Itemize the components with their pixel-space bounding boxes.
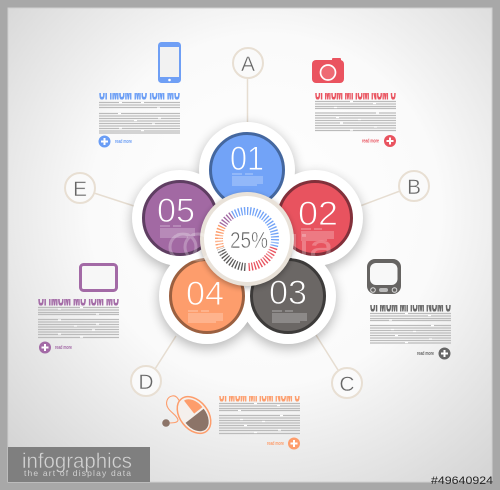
flower white petals bbox=[132, 122, 363, 344]
petal 04 orange: 04 bbox=[186, 275, 224, 313]
text block A bbox=[99, 84, 180, 133]
petal 02 red: 02 bbox=[298, 195, 338, 233]
label E: E bbox=[73, 178, 87, 201]
watermark bbox=[170, 229, 334, 267]
flower shadow bbox=[132, 125, 363, 348]
label E bbox=[65, 173, 95, 203]
brand banner: infographics bbox=[22, 450, 132, 473]
centre disc bbox=[200, 192, 294, 286]
petal 01 blue bbox=[210, 134, 284, 206]
more link D bbox=[39, 342, 72, 354]
icon: phone bbox=[158, 42, 181, 83]
petal 03 dark grey bbox=[252, 260, 324, 332]
percentage text: 25% bbox=[230, 227, 268, 253]
petal 01 blue: 01 bbox=[230, 140, 264, 178]
petal 04 orange bbox=[170, 260, 244, 332]
more link E bbox=[267, 438, 300, 450]
radial progress ring bbox=[219, 211, 275, 267]
text block C bbox=[370, 296, 451, 343]
label B bbox=[399, 171, 429, 201]
icon: tablet bbox=[80, 264, 116, 290]
icon: camera bbox=[312, 58, 344, 83]
more link A bbox=[98, 136, 132, 148]
icon: retro tv bbox=[367, 259, 401, 294]
text block D bbox=[38, 290, 119, 338]
stock id: #49640924 bbox=[431, 475, 493, 487]
more link C bbox=[417, 348, 450, 360]
icon: computer mouse bbox=[162, 390, 218, 440]
petal 02 red bbox=[278, 182, 352, 254]
more link E: read more bbox=[267, 441, 284, 447]
label C bbox=[332, 368, 362, 398]
petal 05 purple: 05 bbox=[157, 192, 195, 230]
label A bbox=[233, 48, 263, 78]
more link D: read more bbox=[55, 345, 72, 351]
centre disc shadow bbox=[200, 194, 294, 288]
watermark: fotolia bbox=[214, 229, 334, 267]
brand banner: the art of display data bbox=[24, 468, 131, 478]
more link B bbox=[362, 135, 396, 147]
petal 05 purple bbox=[144, 182, 216, 254]
more link A: read more bbox=[115, 139, 132, 145]
connector lines bbox=[94, 78, 400, 370]
label A: A bbox=[241, 53, 255, 76]
more link C: read more bbox=[417, 351, 434, 357]
text block E bbox=[219, 386, 300, 434]
brand banner bbox=[8, 447, 150, 482]
label B: B bbox=[407, 176, 421, 199]
more link B: read more bbox=[362, 138, 379, 144]
label D: D bbox=[138, 371, 154, 394]
petal 03 dark grey: 03 bbox=[269, 274, 307, 312]
label C: C bbox=[339, 373, 355, 396]
label D bbox=[131, 366, 161, 396]
text block B bbox=[315, 84, 396, 130]
